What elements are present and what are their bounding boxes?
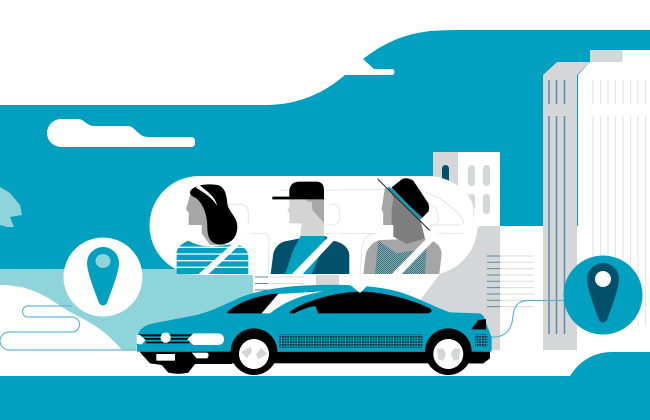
- cloud: [47, 119, 195, 147]
- speech bubble with passengers: [150, 176, 478, 275]
- wire: right route: [485, 300, 575, 337]
- hat band: [388, 187, 422, 219]
- face: [382, 188, 425, 244]
- seat belt: [199, 233, 252, 274]
- building: small back block: [433, 152, 500, 232]
- wire: left route: [0, 306, 136, 350]
- headlight right: [187, 333, 224, 345]
- windshield glare: [262, 291, 323, 313]
- body: [137, 285, 492, 352]
- shirt: [285, 236, 325, 274]
- grille: [139, 334, 193, 343]
- side windows: [290, 292, 432, 313]
- hair: [307, 199, 324, 223]
- seat belt: [392, 233, 441, 274]
- badge: [160, 332, 171, 343]
- windshield: [227, 293, 278, 313]
- bubble tail over car roof: [338, 275, 378, 293]
- ground: white area by towers: [433, 226, 650, 376]
- jacket: [271, 236, 349, 274]
- tower: grey: [543, 50, 622, 350]
- hat: [392, 178, 429, 218]
- passenger: woman with long hair: [177, 184, 252, 274]
- bottom teal road: [0, 352, 650, 420]
- wheel: rear: [425, 328, 472, 375]
- underbody: [139, 352, 490, 374]
- passenger: woman with hat: [363, 178, 442, 274]
- wheel: front: [231, 328, 277, 375]
- pin marker: right: [564, 256, 642, 334]
- tail light: [471, 319, 486, 329]
- face: [186, 193, 225, 245]
- passenger: man with cap: [271, 182, 349, 274]
- cap: [272, 182, 324, 199]
- seat belt: [292, 233, 341, 274]
- hat brim: [378, 179, 430, 231]
- ground: light teal area: [0, 269, 253, 350]
- bubble shape: [150, 176, 478, 275]
- ground: white road strip: [253, 269, 433, 376]
- hair: [190, 184, 237, 244]
- plate: [156, 354, 175, 361]
- headlight left: [137, 335, 146, 344]
- rear dots: [475, 334, 488, 347]
- leaf: [0, 187, 22, 227]
- car: [137, 285, 492, 375]
- pin marker: left: [64, 238, 142, 316]
- building: grey plinth beside car: [414, 226, 500, 350]
- seat outlines: [227, 189, 474, 274]
- fog lamp: [192, 353, 209, 358]
- sky: teal background shape: [0, 30, 650, 269]
- text lines: centre: [255, 277, 304, 290]
- shoulders: [363, 238, 442, 274]
- grey block under bubble: [316, 270, 339, 294]
- door dots: [279, 334, 423, 348]
- text lines: right: [487, 256, 534, 307]
- tower: white: [578, 50, 650, 352]
- passengers group: [177, 178, 474, 274]
- striped top: [177, 241, 248, 274]
- ground: white hill: [0, 285, 122, 350]
- face and neck: [287, 199, 324, 238]
- sunglasses: [196, 185, 217, 206]
- dress: [375, 241, 427, 274]
